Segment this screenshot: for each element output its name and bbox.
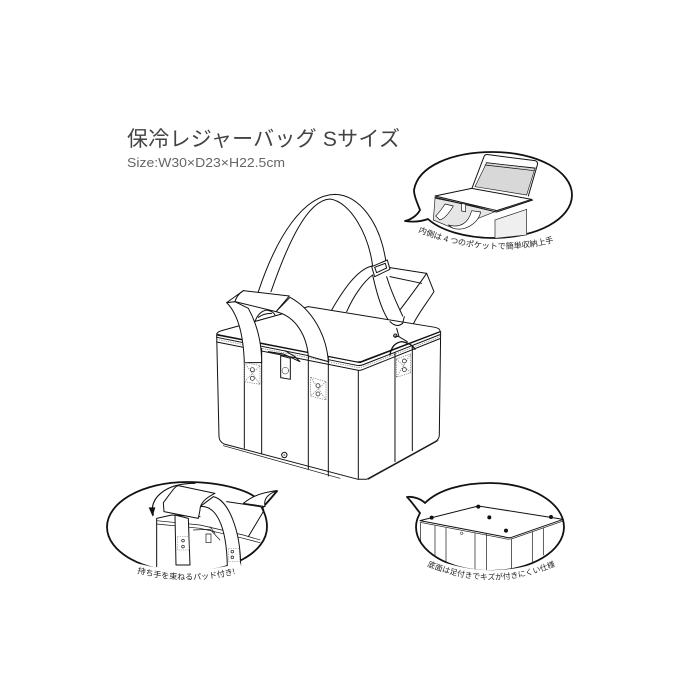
bubble outline [407, 483, 564, 571]
shoulder strap [258, 194, 434, 324]
bubble outline [405, 152, 572, 238]
caption background [418, 229, 566, 246]
illustration: main cooler bag [217, 194, 441, 479]
callout: bottom feet [407, 483, 564, 577]
callout: interior pockets [405, 152, 572, 246]
title: 保冷レジャーバッグ Sサイズ [127, 128, 400, 151]
callout: handle pad [107, 482, 277, 577]
bag underside drawing [420, 505, 563, 570]
bubble outline [107, 482, 277, 572]
caption background [137, 569, 242, 577]
rivet patches [244, 354, 411, 400]
caption: bottom feet: 底面は足付きでキズが付きにくい仕様 [427, 560, 556, 580]
caption: handle pad: 持ち手を束ねるパッド付き! [138, 566, 235, 580]
bottom foot [282, 452, 287, 458]
zipper pull [268, 351, 300, 379]
handles and pad [227, 291, 328, 363]
caption background [427, 562, 558, 577]
open box drawing [433, 155, 538, 238]
buckle and clip [372, 260, 415, 355]
bag body [217, 307, 441, 479]
handle drawing [149, 483, 277, 567]
size text: Size:W30×D23×H22.5cm [127, 155, 285, 170]
caption: interior pockets: 内側は 4 つのポケットで簡単収納上手 [418, 227, 553, 250]
straps on body [244, 347, 412, 476]
